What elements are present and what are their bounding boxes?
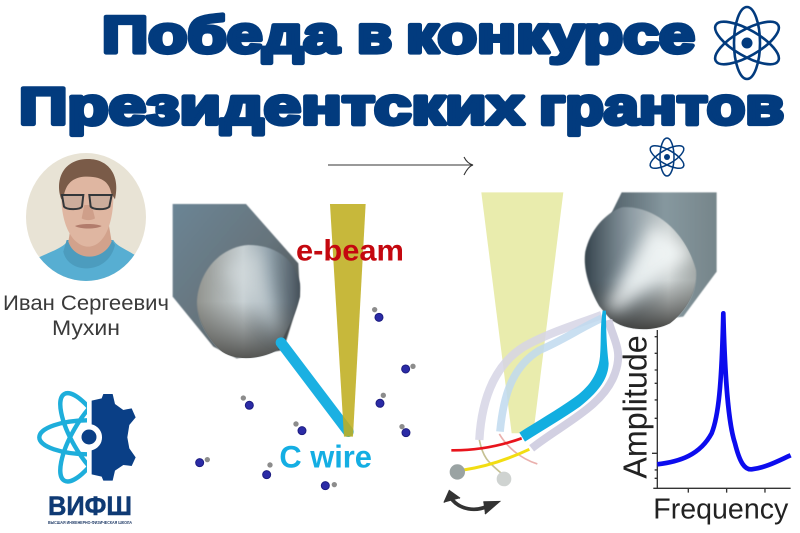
resonance curve <box>657 313 791 469</box>
logo wordmark: ВИФШ <box>48 491 132 521</box>
electron beam <box>330 204 366 437</box>
red fibre <box>451 438 522 450</box>
chart axes <box>652 330 791 493</box>
diagram: e-beam growth <box>173 204 416 490</box>
title: Президентских <box>19 78 524 136</box>
title: конкурсе <box>406 6 695 64</box>
title: грантов <box>539 78 784 136</box>
holder cylinder <box>587 192 717 323</box>
grey deflected fibre <box>479 440 503 475</box>
resonance chart <box>618 313 791 525</box>
icon: small atom <box>647 138 687 176</box>
carbon wire <box>281 343 348 432</box>
light bead <box>497 472 511 486</box>
ghost wire lower <box>532 320 618 448</box>
electron beam <box>481 192 563 433</box>
title: Победа <box>102 6 340 64</box>
holder cylinder <box>173 204 300 358</box>
arrow <box>328 157 473 175</box>
person name: Мухин <box>52 316 120 340</box>
person name: Иван Сергеевич <box>3 291 169 315</box>
holder tip face <box>197 245 300 358</box>
title <box>19 6 784 136</box>
logo gear half <box>92 394 136 481</box>
logo hub <box>82 430 96 444</box>
logo subtitle: ВЫСШАЯ ИНЖЕНЕРНО-ФИЗИЧЕСКАЯ ШКОЛА <box>48 520 132 525</box>
icon: large atom <box>709 7 785 79</box>
person name <box>3 291 169 340</box>
logo atom orbits <box>37 390 87 484</box>
label: e-beam: e-beam <box>296 235 404 268</box>
double arrow <box>444 491 499 514</box>
yellow fibre <box>463 449 529 470</box>
title: в <box>357 6 392 64</box>
grey bead <box>450 464 465 480</box>
carbon wire <box>519 311 609 442</box>
x axis label: Frequency <box>653 493 789 525</box>
logo: ВИФШ <box>39 385 139 525</box>
pink deflected fibre <box>499 434 537 464</box>
portrait photo <box>26 153 146 283</box>
holder tip face <box>585 207 696 329</box>
ghost wire middle <box>500 318 602 432</box>
y axis label: Amplitude <box>618 335 655 479</box>
diagram: resonance <box>444 192 791 525</box>
precursor molecules <box>196 307 416 490</box>
label: C wire: C wire <box>279 439 372 474</box>
ghost wire upper <box>479 315 602 440</box>
